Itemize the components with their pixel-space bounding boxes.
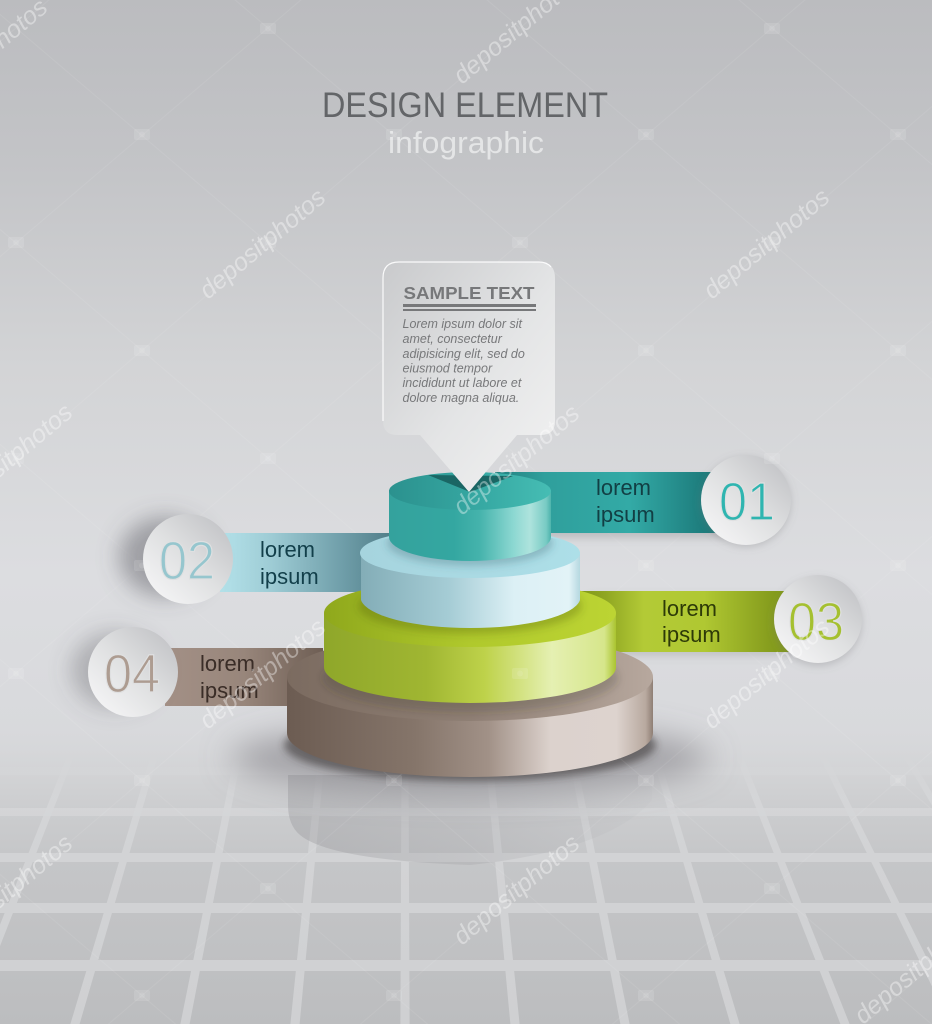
callout body text: adipisicing elit, sed do — [402, 347, 525, 361]
ribbon 03 label: lorem — [662, 596, 717, 621]
ribbon 02 — [220, 533, 395, 592]
number badge 03: 03 — [788, 592, 844, 652]
watermark: depositphotos — [698, 183, 835, 305]
watermark: depositphotos — [448, 399, 585, 521]
number badge 04: 04 — [104, 644, 160, 704]
ribbon 04 — [165, 648, 323, 706]
subtitle: infographic — [388, 125, 544, 160]
ribbon 01 label: lorem — [596, 475, 651, 500]
watermark: depositphotos — [194, 613, 331, 735]
reflection of the pyramid on the floor — [288, 775, 652, 865]
callout body text: amet, consectetur — [402, 332, 503, 346]
title — [322, 86, 608, 160]
watermark: depositphotos — [194, 183, 331, 305]
number badge 03 — [774, 575, 862, 666]
callout: sample text — [383, 262, 555, 492]
callout body text: dolore magna aliqua. — [402, 391, 519, 405]
number badge 02 — [119, 514, 233, 604]
ribbon 03 label: ipsum — [662, 622, 721, 647]
ribbon 01 — [495, 472, 725, 538]
watermark: depositphotos — [698, 613, 835, 735]
number badge 01 — [701, 455, 791, 547]
heading underline — [403, 304, 536, 311]
cylinder tier 2: light blue — [358, 528, 582, 634]
number badge 02: 02 — [159, 531, 215, 591]
cylinder tier 3: green — [322, 579, 618, 712]
callout body text: incididunt ut labore et — [402, 376, 522, 390]
watermark: depositphotos — [448, 829, 585, 951]
ribbon 02 label: lorem — [260, 537, 315, 562]
ribbon 03 — [575, 591, 795, 656]
callout body text: Lorem ipsum dolor sit — [402, 317, 523, 331]
ribbon 04 label: ipsum — [200, 678, 259, 703]
callout heading: SAMPLE TEXT — [404, 283, 535, 303]
ribbon 04 label: lorem — [200, 651, 255, 676]
ribbon 01 label: ipsum — [596, 502, 655, 527]
number badge 04 — [71, 627, 178, 717]
cylinder tier 1: teal — [387, 472, 553, 566]
number badge 01: 01 — [719, 472, 775, 532]
ribbon 02 label: ipsum — [260, 564, 319, 589]
callout body text: eiusmod tempor — [402, 362, 493, 376]
cylinder tier 4: brown — [287, 633, 653, 777]
ground shadow — [230, 709, 710, 792]
pointer shadow wedge — [428, 475, 513, 492]
title: DESIGN ELEMENT — [322, 86, 608, 125]
floor grid — [0, 725, 932, 1024]
